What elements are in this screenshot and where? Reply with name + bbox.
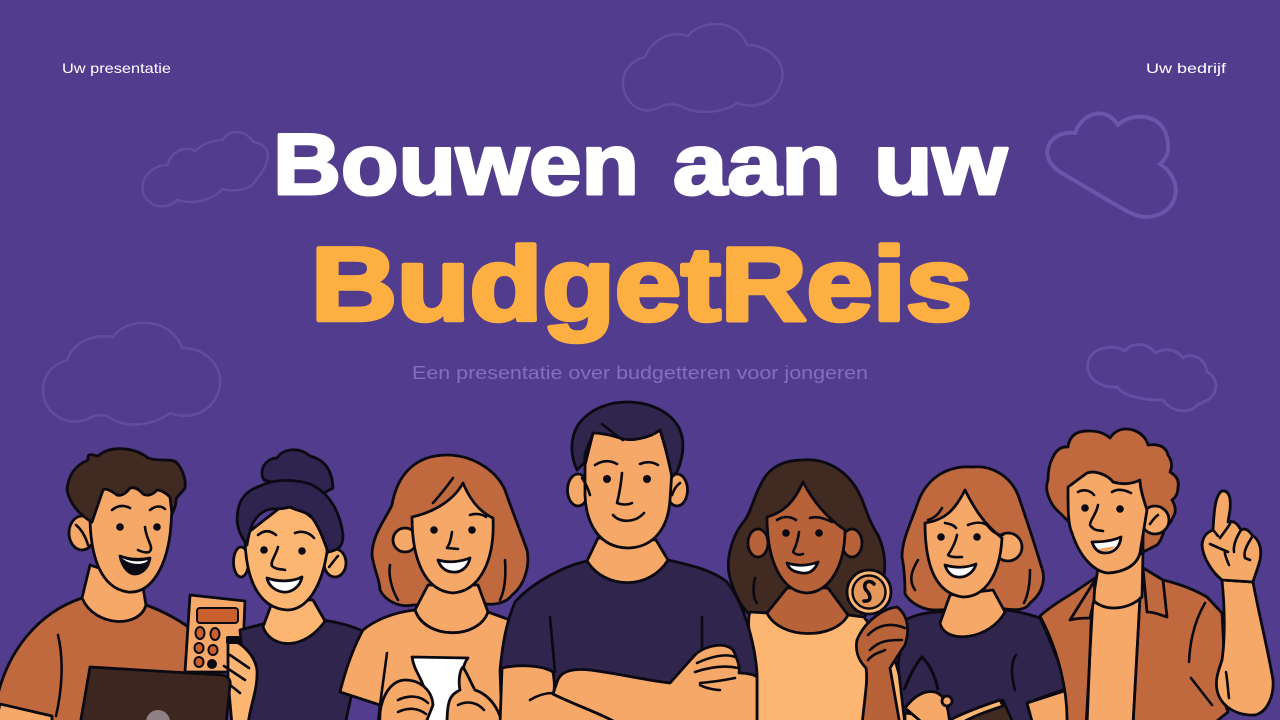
cloud: lower left bbox=[43, 323, 220, 424]
cloud: upper left bbox=[142, 132, 268, 206]
person: woman with notebook bbox=[898, 467, 1070, 720]
title line 1: uw bbox=[874, 117, 1008, 213]
cloud: lower right bbox=[1088, 344, 1216, 411]
icon: raised hand bbox=[1202, 491, 1261, 582]
person: woman with bun bbox=[224, 450, 365, 720]
hands bbox=[380, 680, 433, 720]
icon: calculator bbox=[185, 595, 245, 672]
person: woman with coin bbox=[728, 460, 905, 720]
coin hand bbox=[847, 570, 908, 720]
person: curly-haired man pointing up bbox=[1040, 429, 1273, 720]
title line 2: BudgetReis bbox=[311, 227, 972, 343]
crossed arms bbox=[500, 666, 620, 720]
header: presentation label: Uw presentatie bbox=[62, 60, 171, 76]
icon: paper note bbox=[412, 657, 468, 720]
cloud: top centre bbox=[623, 24, 783, 112]
laptop bbox=[80, 667, 230, 720]
icon: hand holding calculator bbox=[228, 640, 257, 720]
person: young man with calculator and laptop bbox=[0, 449, 245, 720]
subtitle: Een presentatie over budgetteren voor jongeren bbox=[412, 363, 868, 383]
title line 1: aan bbox=[673, 117, 841, 213]
person: man with crossed arms bbox=[500, 402, 757, 720]
icon: pen and notebook bbox=[904, 657, 1014, 720]
icon: coin bbox=[847, 570, 891, 614]
title line 1: Bouwen bbox=[273, 117, 639, 213]
pointing arm bbox=[1216, 580, 1273, 715]
person: woman with paper bbox=[340, 455, 528, 720]
header: company label: Uw bedrijf bbox=[1146, 60, 1226, 76]
title line 1 bbox=[273, 117, 1008, 213]
cloud: upper right bbox=[1047, 113, 1176, 217]
